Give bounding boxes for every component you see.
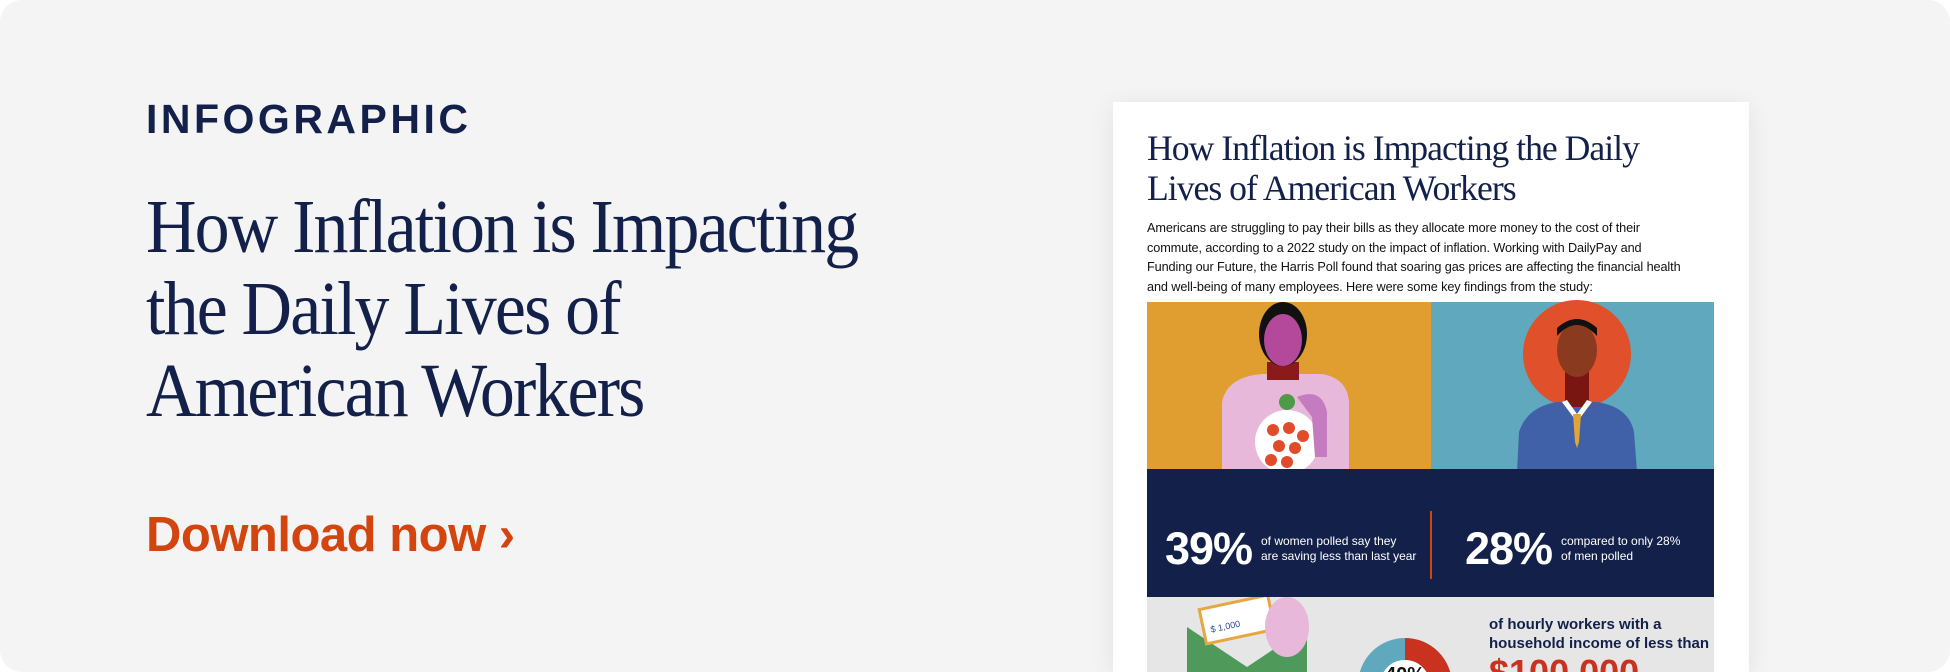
- stat: 39% women: 39%: [1165, 523, 1252, 574]
- call to action: Download now: Download now ›: [146, 508, 515, 562]
- card title: Lives of American Workers: [1147, 168, 1516, 208]
- illustration: envelope and check: [1187, 597, 1309, 672]
- donut caption: household income of less than: [1489, 635, 1709, 652]
- stats band: 39% and 28%: of women polled say they: [1261, 534, 1396, 548]
- stats band: 39% and 28%: compared to only 28%: [1561, 534, 1680, 548]
- stat: 28% men: 28%: [1465, 523, 1552, 574]
- donut chart 40%: [1360, 638, 1450, 672]
- donut caption: [1489, 616, 1709, 652]
- main title: [146, 185, 858, 433]
- main title: How Inflation is Impacting: [146, 185, 857, 269]
- man: [1517, 300, 1637, 472]
- card title: How Inflation is Impacting the Daily: [1147, 128, 1639, 168]
- stats band: 39% and 28%: [1147, 469, 1714, 597]
- bottom section: hourly workers donut: [1147, 597, 1714, 672]
- illustration panel: woman and man: [1147, 300, 1714, 469]
- card intro paragraph: Americans are struggling to pay their bills as they allocate more money to the cost of their commute, according to a 2022 study on the impact of inflation. Working with DailyPay and Funding our Future, the Harris Poll found that soaring gas prices are affecting the financial health and well-being of many employees. Here were some key findings from the study:: [1147, 221, 1681, 294]
- stats band: 39% and 28%: are saving less than last year: [1261, 549, 1416, 563]
- woman: [1222, 302, 1349, 474]
- card title: [1147, 128, 1640, 208]
- illustration: envelope and check: $ 1,000: [1210, 619, 1241, 635]
- stats band: 39% and 28%: of men polled: [1561, 549, 1633, 563]
- main title: the Daily Lives of: [146, 267, 620, 351]
- donut caption: of hourly workers with a: [1489, 616, 1662, 633]
- eyebrow: INFOGRAPHIC: INFOGRAPHIC: [146, 96, 472, 142]
- main title: American Workers: [146, 349, 644, 433]
- document preview card: [1113, 102, 1749, 672]
